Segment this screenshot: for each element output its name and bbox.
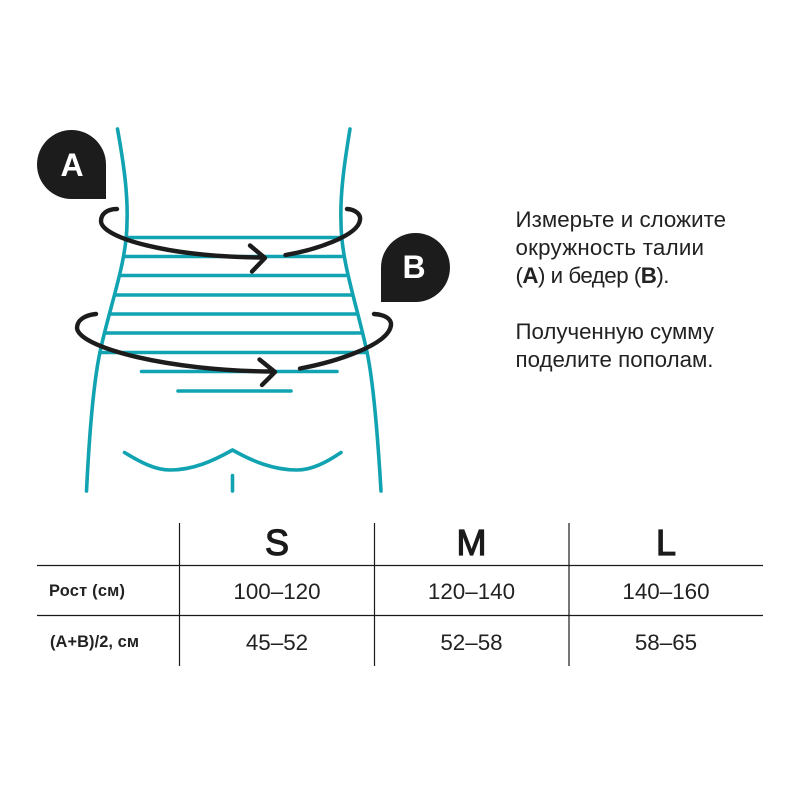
waist measuring arrow A xyxy=(101,209,360,272)
row: height: 100–120 xyxy=(233,579,321,604)
size table xyxy=(37,522,763,666)
instruction text xyxy=(516,207,726,372)
row: half sum: (A+B)/2, см xyxy=(50,633,139,651)
badge A: A xyxy=(60,147,84,183)
instruction text: Измерьте и сложите xyxy=(516,207,726,232)
torso diagram xyxy=(77,129,391,491)
hip measuring arrow B xyxy=(77,314,391,385)
instruction text: окружность талии xyxy=(516,235,704,260)
instruction text: Полученную сумму xyxy=(516,319,715,344)
row: height: 120–140 xyxy=(428,579,515,604)
badge B xyxy=(381,233,450,302)
row: half sum: 45–52 xyxy=(246,630,308,655)
row: half sum xyxy=(50,630,697,655)
centre mark xyxy=(231,476,234,491)
body outline: right side xyxy=(341,129,381,491)
table header: L xyxy=(656,522,676,563)
row: height: 140–160 xyxy=(622,579,710,604)
table header xyxy=(265,522,676,563)
body outline: left side xyxy=(86,129,127,491)
instruction text: (A) и бедер (B). xyxy=(516,263,670,288)
table header: S xyxy=(265,522,289,563)
row: half sum: 58–65 xyxy=(635,630,697,655)
instruction text: поделите пополам. xyxy=(516,347,714,372)
table header: M xyxy=(456,522,486,563)
belt stripes xyxy=(100,238,367,391)
row: height xyxy=(49,579,710,604)
row: height: Рост (см) xyxy=(49,582,125,600)
badge A xyxy=(37,130,106,199)
hip crease line xyxy=(124,450,341,470)
badge B: B xyxy=(402,249,426,285)
row: half sum: 52–58 xyxy=(440,630,503,655)
